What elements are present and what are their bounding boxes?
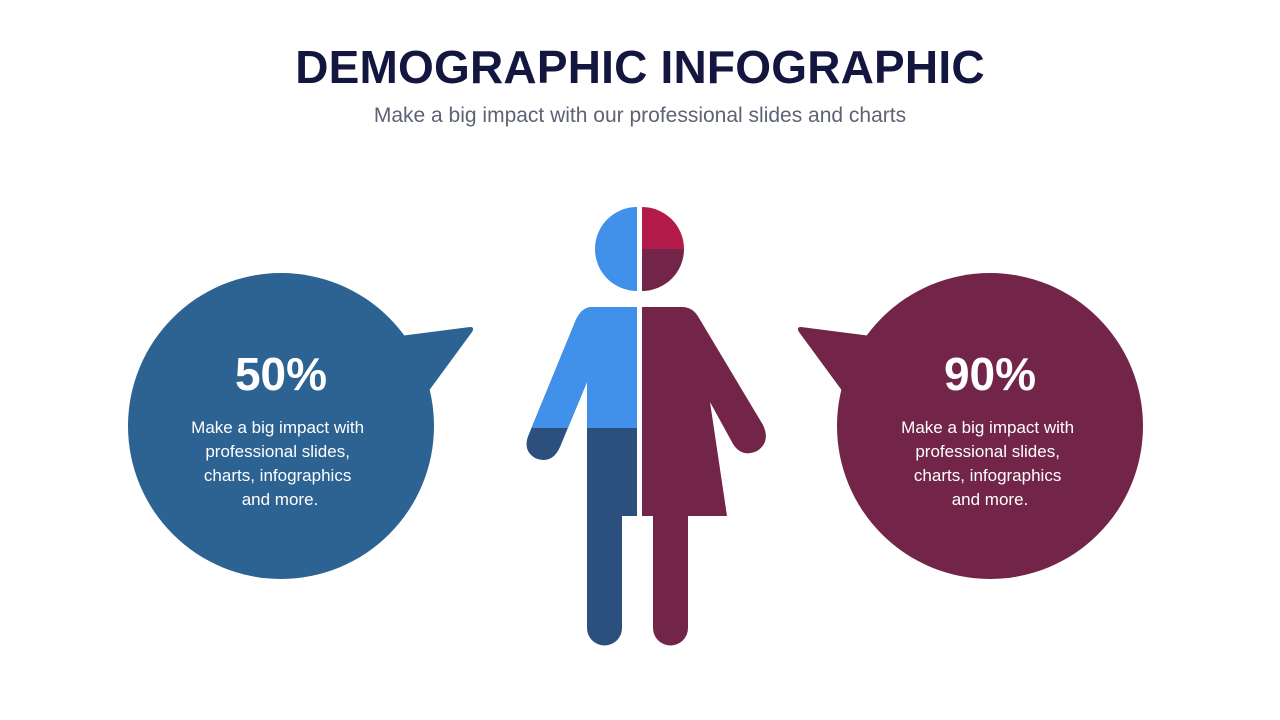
icon: half male half female figure [527,207,766,646]
left description: Make a big impact with [191,418,364,437]
title: DEMOGRAPHIC INFOGRAPHIC [295,41,985,93]
right description: and more. [952,490,1028,509]
right description: charts, infographics [914,466,1061,485]
panel: right speech bubble [798,273,1143,579]
right description: professional slides, [915,442,1060,461]
female body [642,307,766,646]
left description: charts, infographics [204,466,351,485]
male head half [595,207,637,291]
female head half [642,207,684,291]
left description: professional slides, [205,442,350,461]
left percentage: 50% [235,348,327,400]
right description: Make a big impact with [901,418,1074,437]
male body [527,307,637,646]
subtitle: Make a big impact with our professional slides and charts [374,104,906,127]
right percentage: 90% [944,348,1036,400]
left description: and more. [242,490,318,509]
panel: left speech bubble [128,273,473,579]
